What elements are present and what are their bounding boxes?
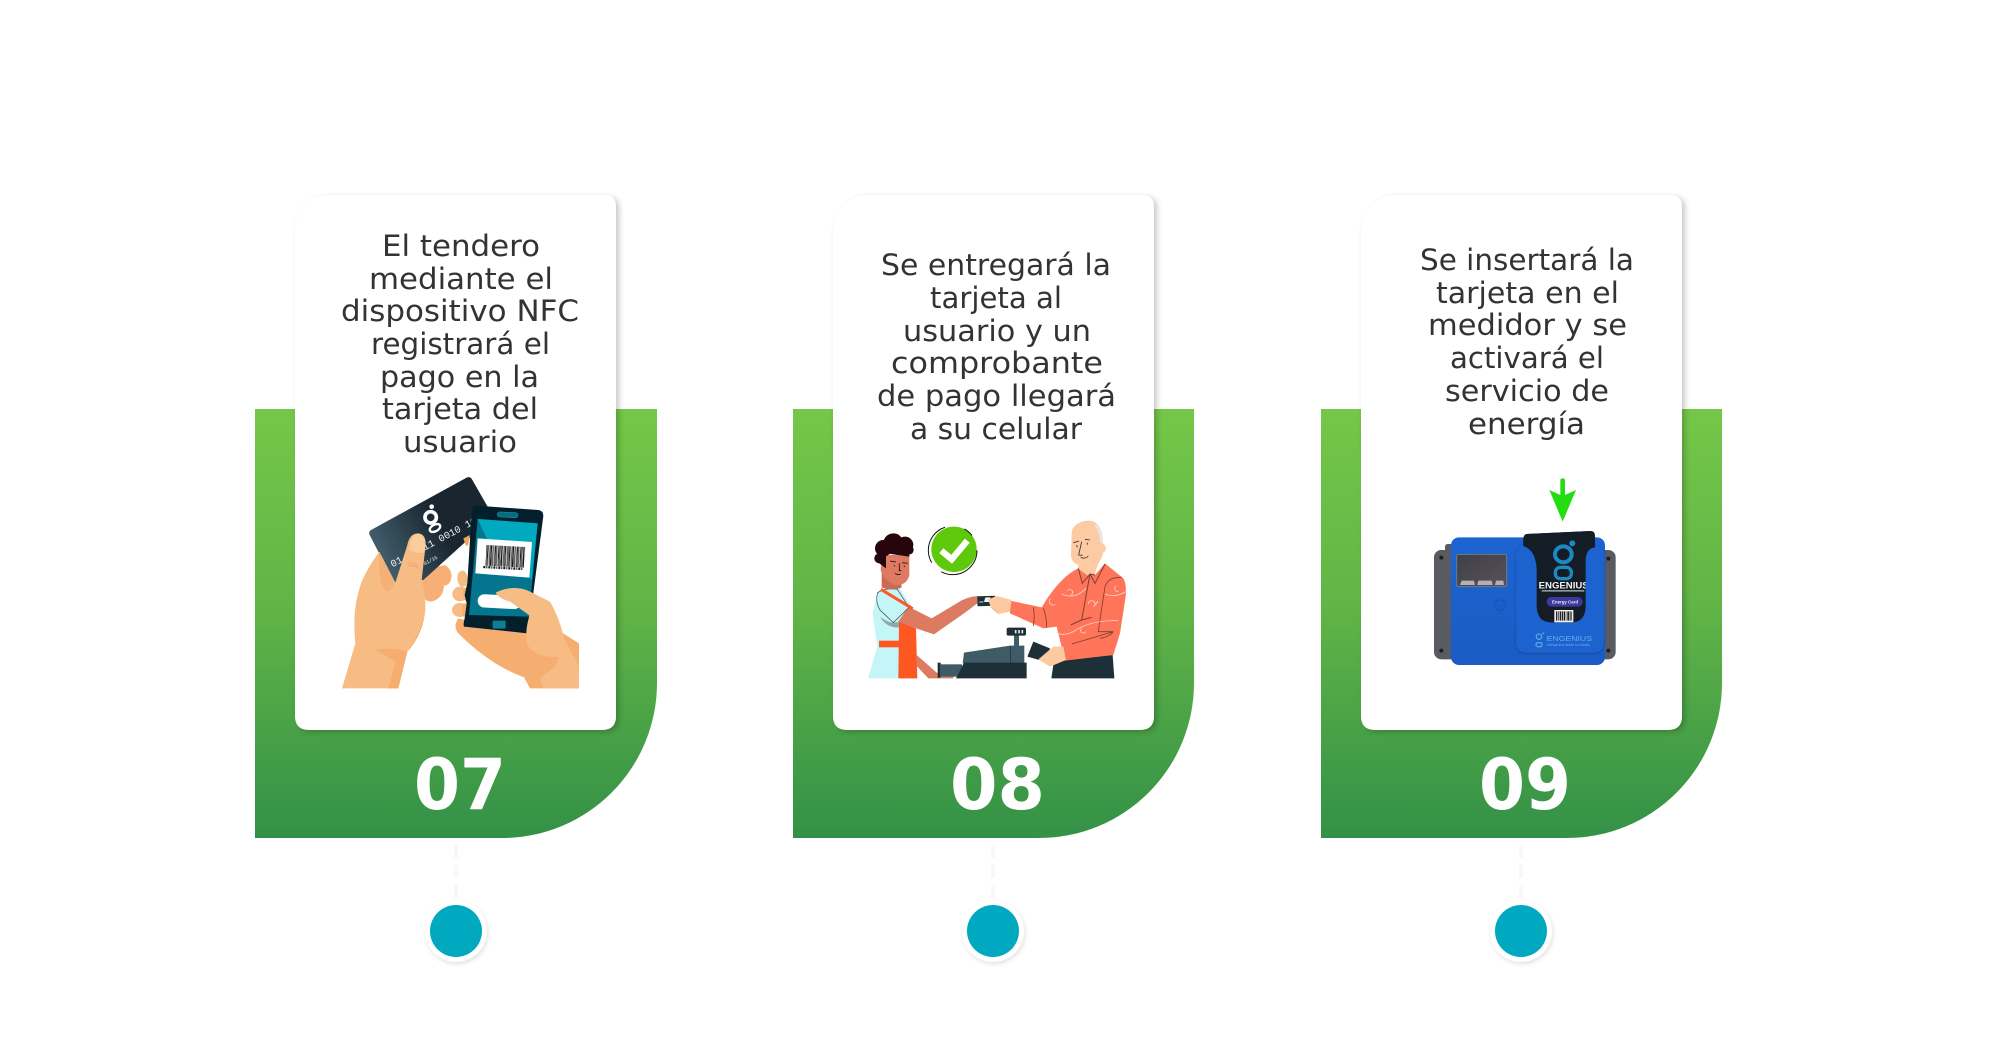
number 07: 07 <box>414 744 506 826</box>
number 08: 08 <box>950 744 1045 826</box>
energy card <box>1516 531 1604 653</box>
pocket logo <box>1536 632 1592 647</box>
green base shape 07 <box>255 409 657 838</box>
white card 08 <box>833 195 1154 730</box>
text block 07: usuario <box>403 425 517 459</box>
dashed connector 07 <box>454 845 458 898</box>
panel: step 09 <box>1321 195 1722 962</box>
bank card: 01/15 <box>423 555 439 567</box>
cash register <box>938 628 1027 678</box>
illustration: meter with card and arrow <box>1434 478 1616 665</box>
dashed connector 08 <box>991 845 995 898</box>
energy card: Energy Card <box>1552 600 1578 605</box>
bank card <box>369 477 493 582</box>
text block 09 <box>1420 243 1634 441</box>
timeline dot 07 <box>425 900 487 962</box>
text block 07: tarjeta del <box>382 392 538 426</box>
white card 09 <box>1361 195 1682 730</box>
text block 09: tarjeta en el <box>1436 276 1619 310</box>
pocket logo: Inteligencia desde su bolsillo <box>1547 643 1590 647</box>
illustration: hands holding card and phone <box>342 477 579 688</box>
illustration: shopkeeper hands card to customer <box>868 521 1126 678</box>
text block 08: comprobante <box>891 346 1103 380</box>
number 09: 09 <box>1479 744 1571 826</box>
text block 08 <box>877 248 1116 446</box>
energy card: ENGENIUS <box>1539 581 1589 591</box>
bank card: 01 <box>389 555 405 570</box>
dashed connector 09 <box>1519 845 1523 898</box>
bank card: 11 0010 10 <box>421 515 479 553</box>
thumb nail <box>409 534 425 553</box>
right hand thumb and back <box>496 588 579 688</box>
timeline dot 08 <box>962 900 1024 962</box>
right palm <box>455 617 579 688</box>
text block 07: dispositivo NFC <box>341 294 579 328</box>
panel: step 08 <box>793 195 1194 962</box>
text block 08: usuario y un <box>903 314 1091 348</box>
text block 09: energía <box>1468 407 1585 441</box>
panel: step 07 <box>255 195 657 962</box>
shopkeeper <box>868 533 977 678</box>
left hand <box>342 533 426 688</box>
text block 09: medidor y se <box>1428 308 1627 342</box>
right hand fingers <box>452 571 468 617</box>
text block 08: de pago llegará <box>877 379 1116 413</box>
customer <box>988 521 1126 678</box>
arrow down <box>1549 478 1576 522</box>
text block 08: a su celular <box>910 412 1082 446</box>
palm shadow <box>379 552 395 591</box>
text block 07: mediante el <box>369 262 553 296</box>
check icon <box>928 526 977 575</box>
text block 09: servicio de <box>1445 374 1609 408</box>
text block 07 <box>341 229 579 459</box>
text block 09: activará el <box>1450 341 1604 375</box>
text block 09: Se insertará la <box>1420 243 1634 277</box>
meter back plate <box>1434 544 1616 659</box>
timeline dot 09 <box>1490 900 1552 962</box>
text block 07: registrará el <box>371 327 550 361</box>
fingers behind card <box>422 565 452 602</box>
text block 08: tarjeta al <box>930 281 1062 315</box>
credit card <box>977 596 996 606</box>
phone <box>464 506 543 633</box>
green base shape 08 <box>793 409 1194 838</box>
text block 08: Se entregará la <box>881 248 1111 282</box>
green base shape 09 <box>1321 409 1722 838</box>
pocket logo: ENGENIUS <box>1547 634 1592 643</box>
white card 07 <box>295 195 616 730</box>
text block 07: pago en la <box>380 360 539 394</box>
meter body <box>1451 537 1605 665</box>
text block 07: El tendero <box>382 229 540 263</box>
